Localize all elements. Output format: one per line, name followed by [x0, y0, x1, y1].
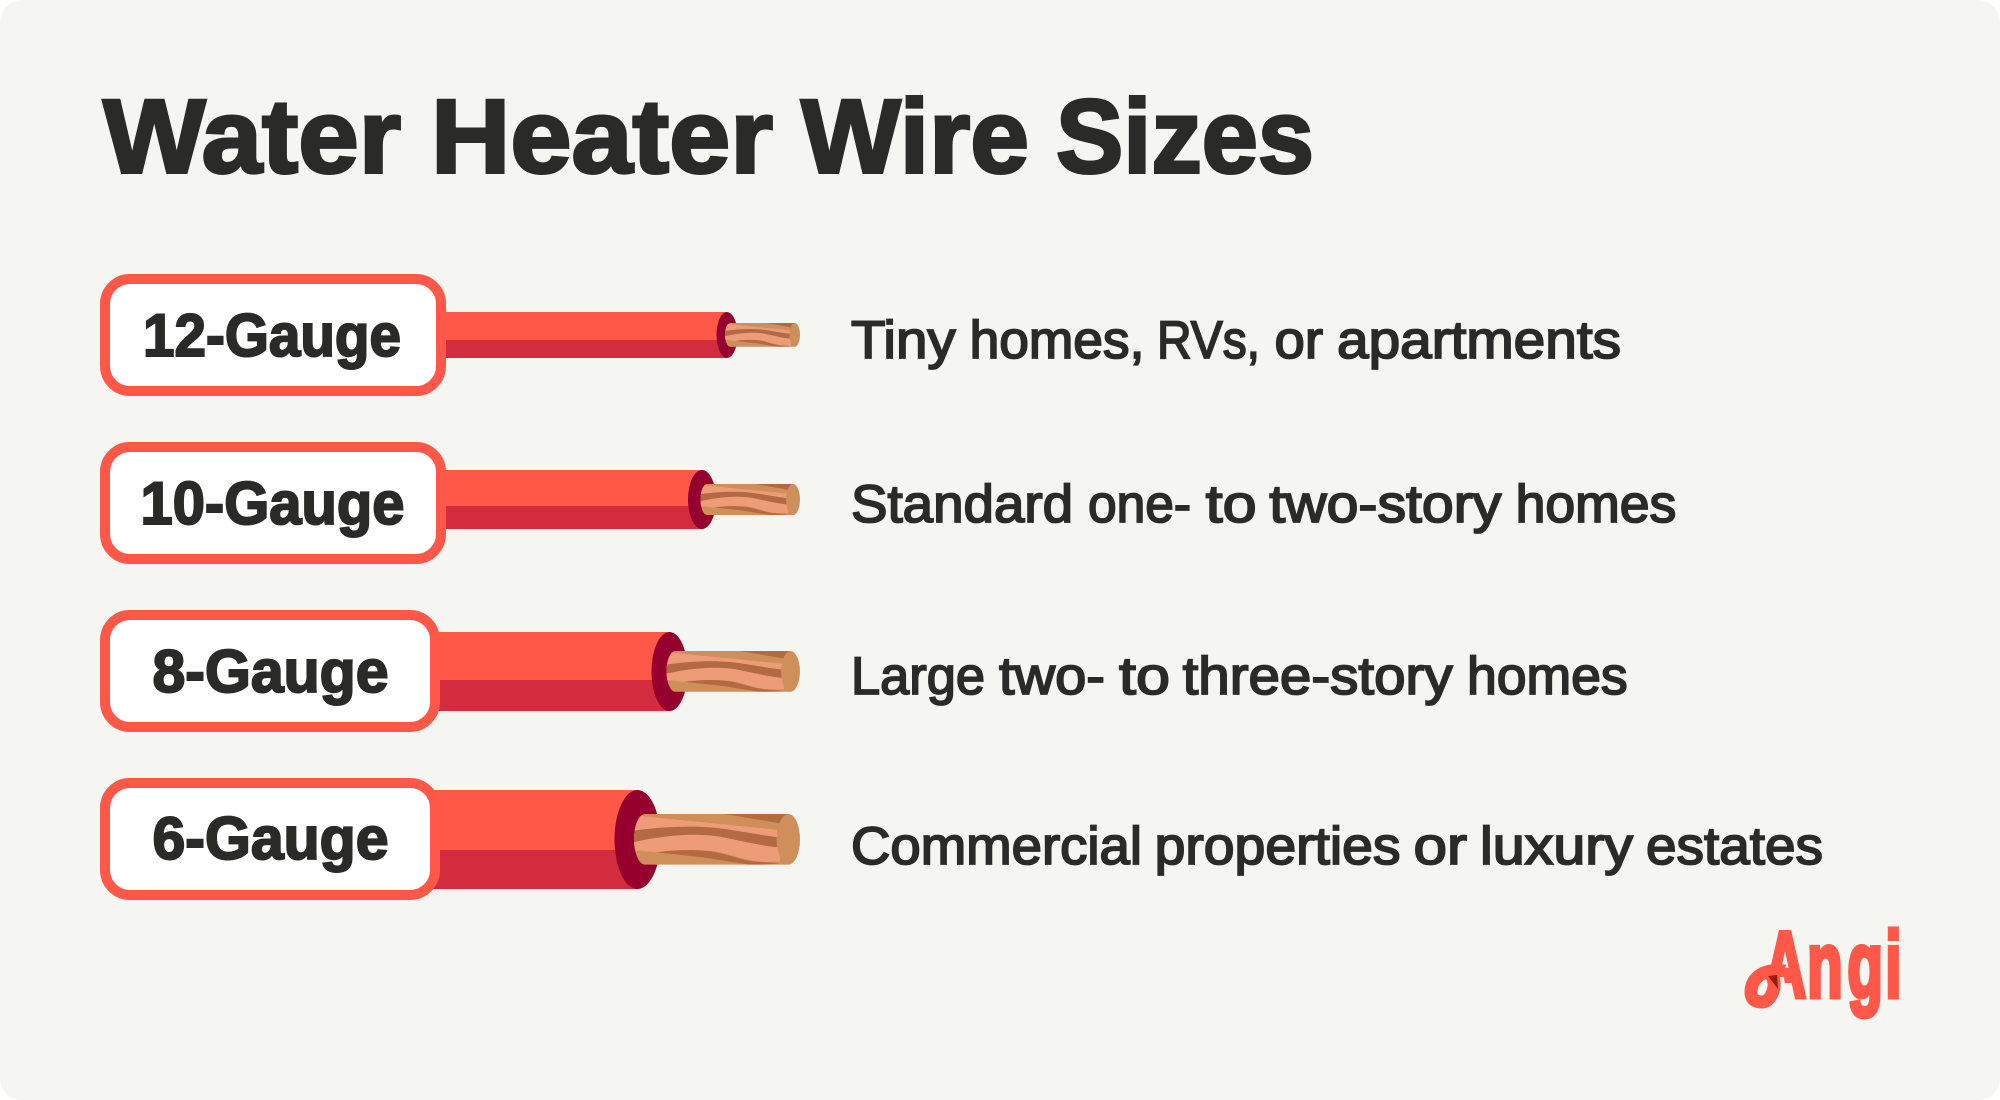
row: 8-gauge: [105, 615, 1628, 727]
label: 10-gauge: 10-Gauge: [140, 470, 404, 537]
title: [103, 78, 1314, 196]
title: Sizes: [1056, 78, 1314, 196]
label: 6-gauge: 6-Gauge: [152, 805, 388, 872]
wire: 6-gauge: [400, 790, 800, 889]
description: 6-gauge: or: [1414, 817, 1467, 876]
title: Heater: [431, 78, 773, 196]
description: 12-gauge: [851, 311, 1621, 370]
label: 8-gauge: [105, 615, 435, 727]
row: 6-gauge: [105, 783, 1823, 895]
description: 10-gauge: [851, 475, 1676, 534]
wire: 8-gauge: [400, 632, 800, 711]
description: 6-gauge: estates: [1646, 817, 1823, 876]
wire: 10-gauge: [400, 470, 800, 529]
title: Wire: [801, 78, 1029, 196]
description: 8-gauge: to: [1119, 647, 1170, 706]
row: 10-gauge: [105, 447, 1676, 559]
label: 12-gauge: 12-Gauge: [143, 302, 401, 369]
label: 12-gauge: [105, 279, 441, 391]
description: 6-gauge: luxury: [1480, 817, 1634, 876]
description: 10-gauge: homes: [1516, 475, 1676, 534]
row: 12-gauge: [105, 279, 1621, 391]
description: 8-gauge: homes: [1467, 647, 1628, 706]
description: 6-gauge: properties: [1155, 817, 1401, 876]
description: 12-gauge: or: [1274, 311, 1323, 370]
wire: 12-gauge: [400, 312, 800, 358]
description: 12-gauge: RVs,: [1157, 311, 1260, 370]
label: 8-gauge: 8-Gauge: [152, 638, 388, 705]
description: 10-gauge: to: [1206, 475, 1257, 534]
description: 6-gauge: [851, 817, 1823, 876]
description: 12-gauge: apartments: [1337, 311, 1621, 370]
label: 10-gauge: [105, 447, 441, 559]
description: 8-gauge: [851, 647, 1628, 706]
description: 8-gauge: Large: [851, 647, 985, 706]
description: 12-gauge: homes,: [970, 311, 1144, 370]
description: 8-gauge: two-: [999, 647, 1105, 706]
label: 6-gauge: [105, 783, 435, 895]
description: 10-gauge: one-: [1088, 475, 1191, 534]
description: 10-gauge: Standard: [851, 475, 1073, 534]
description: 6-gauge: Commercial: [851, 817, 1142, 876]
description: 8-gauge: three-story: [1183, 647, 1453, 706]
title: Water: [103, 78, 401, 196]
logo: Angi: Angi: [1764, 912, 1901, 1017]
description: 12-gauge: Tiny: [851, 311, 956, 370]
description: 10-gauge: two-story: [1269, 475, 1502, 534]
